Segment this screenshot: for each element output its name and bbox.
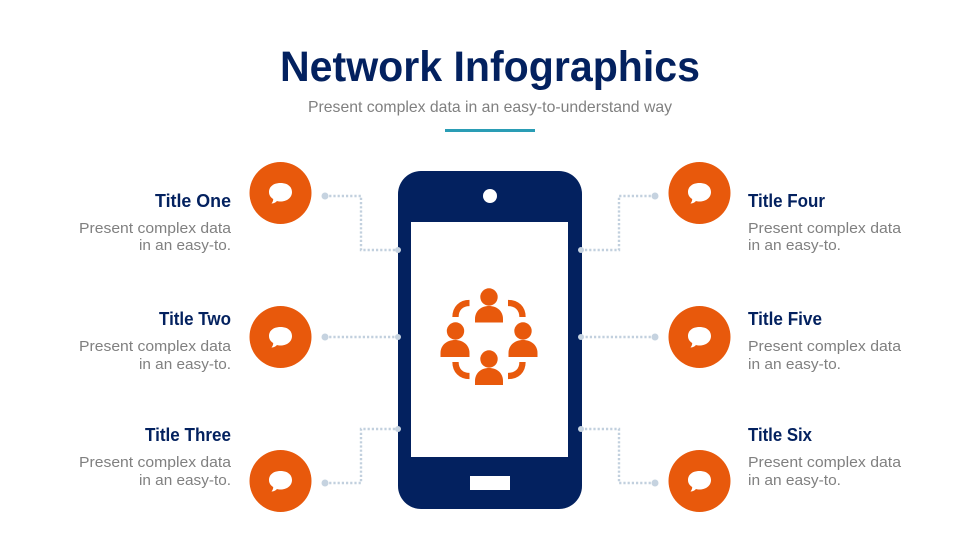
- connector: title five: [578, 334, 658, 340]
- text block: title six: Title Six: [748, 425, 812, 445]
- subtitle: Present complex data in an easy-to-understand way: [308, 99, 672, 116]
- icon: speech bubble four: [668, 162, 730, 224]
- text block: title two: [79, 309, 232, 373]
- connector: title six: [578, 426, 658, 486]
- icon: network of people: [440, 288, 538, 385]
- text block: title four: Title Four: [748, 191, 825, 211]
- phone: [398, 171, 582, 509]
- icon: speech bubble six: [668, 450, 730, 512]
- connector: title one: [322, 192, 401, 253]
- text block: title six: Present complex data: [748, 454, 902, 471]
- icon: speech bubble five: [668, 306, 730, 368]
- text block: title one: Present complex data: [79, 220, 232, 237]
- icon: speech bubble one: [250, 162, 312, 224]
- connector: title four: [578, 192, 658, 253]
- text block: title one: Title One: [155, 191, 231, 211]
- text block: title four: Present complex data: [748, 220, 902, 237]
- icon: speech bubble two: [250, 306, 312, 368]
- title underline: [445, 129, 535, 132]
- text block: title three: in an easy-to.: [139, 472, 231, 489]
- text block: title five: Present complex data: [748, 338, 902, 355]
- text block: title six: in an easy-to.: [748, 472, 841, 489]
- text block: title two: Title Two: [159, 309, 231, 329]
- connector: title two: [322, 334, 401, 340]
- text block: title six: [748, 425, 902, 489]
- connector: title three: [322, 426, 401, 486]
- text block: title five: [748, 309, 902, 373]
- text block: title two: in an easy-to.: [139, 356, 231, 373]
- text block: title three: Present complex data: [79, 454, 232, 471]
- text block: title one: in an easy-to.: [139, 237, 231, 254]
- text block: title five: in an easy-to.: [748, 356, 841, 373]
- icon: speech bubble three: [250, 450, 312, 512]
- text block: title four: [748, 191, 902, 254]
- text block: title three: [79, 425, 232, 489]
- text block: title five: Title Five: [748, 309, 822, 329]
- text block: title one: [79, 191, 232, 254]
- text block: title three: Title Three: [145, 425, 231, 445]
- text block: title four: in an easy-to.: [748, 237, 841, 254]
- title: Network Infographics: [280, 43, 700, 91]
- text block: title two: Present complex data: [79, 338, 232, 355]
